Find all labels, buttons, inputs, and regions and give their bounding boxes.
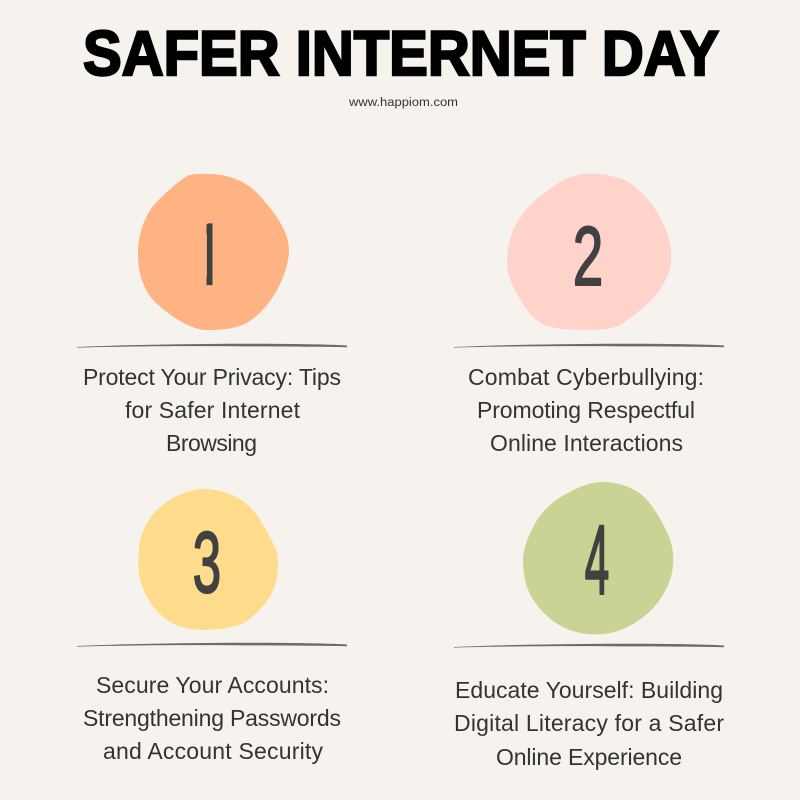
divider stroke	[77, 344, 347, 348]
text: item 3: Secure Your Accounts:	[96, 672, 329, 698]
text: item 2: Promoting Respectful	[477, 397, 695, 423]
numeral 3: 3	[193, 515, 221, 611]
blob: yellow	[138, 489, 278, 630]
text: item 2: Online Interactions	[490, 430, 683, 456]
text: item 4	[454, 677, 724, 770]
numeral 2: 2	[573, 209, 603, 303]
text: item 3: and Account Security	[103, 738, 324, 764]
numeral 1: 1	[194, 208, 224, 303]
panel: item 4	[454, 482, 724, 770]
divider stroke	[454, 344, 724, 348]
blob: green	[523, 482, 673, 634]
website url: www.happiom.com	[348, 97, 458, 109]
blob: pink	[507, 174, 671, 330]
text: item 1: for Safer Internet	[125, 397, 301, 423]
text: item 2: Combat Cyberbullying:	[468, 364, 704, 390]
text: item 3: Strengthening Passwords	[83, 705, 341, 731]
title: SAFER INTERNET DAY	[83, 19, 719, 89]
panel: item 1	[77, 174, 347, 456]
text: item 2	[468, 364, 704, 456]
text: item 1: Protect Your Privacy: Tips	[83, 364, 341, 390]
blob: orange	[138, 174, 289, 330]
numeral 4: 4	[585, 506, 609, 616]
panel: item 3	[77, 489, 347, 764]
text: item 4: Online Experience	[496, 744, 682, 770]
text: item 1	[83, 364, 341, 456]
divider stroke	[454, 644, 724, 648]
text: item 3	[83, 672, 341, 764]
text: item 1: Browsing	[166, 430, 257, 456]
divider stroke	[77, 643, 347, 647]
panel: item 2	[454, 174, 724, 456]
text: item 4: Digital Literacy for a Safer	[454, 710, 724, 736]
text: item 4: Educate Yourself: Building	[455, 677, 723, 703]
